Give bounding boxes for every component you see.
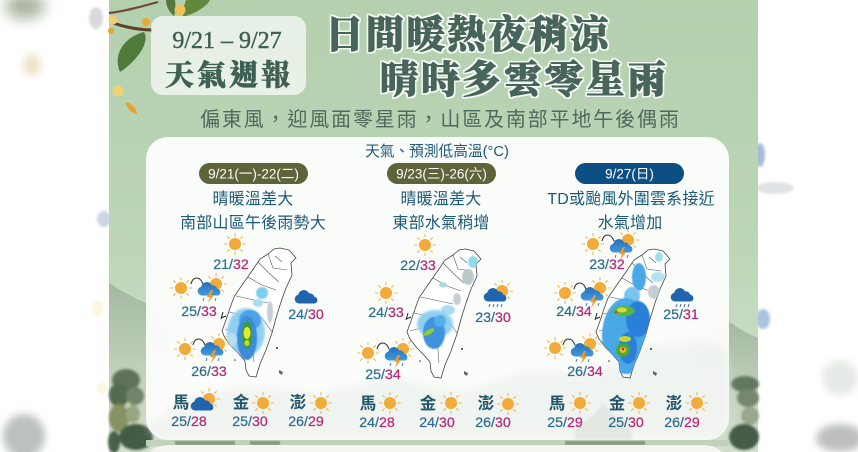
Kinmen: 金 bbox=[420, 393, 437, 413]
subtitle: 偏東風，迎風面零星雨，山區及南部平地午後偶雨 bbox=[200, 108, 681, 131]
date and title badge bbox=[151, 16, 306, 95]
north forecast bbox=[400, 234, 436, 274]
Kinmen bbox=[419, 392, 462, 431]
east forecast bbox=[288, 290, 324, 323]
main title bbox=[325, 14, 668, 102]
north forecast: 22/33 bbox=[400, 258, 436, 274]
date pill 1 bbox=[199, 163, 308, 184]
Kinmen bbox=[608, 392, 650, 431]
central forecast: 24/33 bbox=[368, 305, 404, 321]
central forecast bbox=[170, 274, 226, 320]
south forecast: 26/34 bbox=[567, 364, 603, 380]
badge title: 天氣週報 bbox=[165, 58, 293, 92]
heading 3: 水氣增加 bbox=[598, 214, 662, 232]
north forecast: 23/32 bbox=[589, 257, 625, 273]
heading 2 bbox=[392, 190, 490, 232]
Penghu bbox=[288, 392, 332, 430]
south forecast: 25/34 bbox=[365, 367, 401, 383]
date range: 9/21 – 9/27 bbox=[172, 28, 282, 54]
Penghu bbox=[664, 392, 708, 431]
Kinmen bbox=[232, 392, 274, 430]
branch, leaves and flowers bbox=[108, 0, 210, 114]
central forecast bbox=[368, 282, 404, 321]
date pill 3: 9/27(日) bbox=[605, 166, 654, 182]
south forecast bbox=[358, 338, 414, 383]
Penghu: 澎 bbox=[666, 394, 682, 413]
Kinmen: 25/30 bbox=[232, 414, 268, 430]
south forecast bbox=[174, 334, 230, 380]
Matsu bbox=[547, 392, 590, 431]
Matsu: 馬 bbox=[549, 395, 565, 413]
Penghu: 26/29 bbox=[664, 415, 700, 431]
Matsu: 馬 bbox=[360, 395, 376, 413]
east forecast: 24/30 bbox=[288, 307, 324, 323]
north forecast bbox=[213, 234, 249, 273]
east forecast bbox=[663, 288, 699, 323]
heading 1: 南部山區午後雨勢大 bbox=[180, 214, 326, 232]
date pill 2: 9/23(三)-26(六) bbox=[396, 166, 487, 182]
main title: 晴時多雲零星雨 bbox=[380, 59, 668, 102]
column 2: 9/23-26 bbox=[358, 163, 518, 431]
date pill 3 bbox=[575, 163, 684, 184]
Penghu: 澎 bbox=[478, 394, 494, 413]
Matsu bbox=[171, 388, 220, 430]
column 3: 9/27 bbox=[544, 163, 715, 431]
Kinmen: 金 bbox=[233, 392, 250, 412]
Penghu bbox=[475, 394, 518, 431]
trees bottom left bbox=[108, 369, 153, 452]
central forecast bbox=[554, 278, 610, 320]
Taiwan radar map 2 bbox=[406, 249, 481, 378]
Taiwan radar map 3 bbox=[595, 249, 670, 378]
heading 3 bbox=[547, 190, 715, 232]
Penghu: 26/30 bbox=[475, 415, 511, 431]
south forecast bbox=[544, 334, 603, 380]
heading 2: 晴暖溫差大 bbox=[400, 190, 482, 208]
column 1: 9/21-22 bbox=[170, 163, 332, 430]
south forecast: 26/33 bbox=[191, 364, 227, 380]
north forecast bbox=[582, 230, 638, 273]
central forecast: 24/34 bbox=[556, 304, 592, 320]
trees bottom right bbox=[729, 376, 759, 450]
Kinmen: 24/30 bbox=[419, 415, 455, 431]
Matsu bbox=[359, 392, 400, 431]
Matsu: 25/28 bbox=[171, 414, 207, 430]
heading 1: 晴暖溫差大 bbox=[212, 190, 294, 208]
Penghu: 澎 bbox=[290, 393, 306, 412]
east forecast bbox=[475, 280, 512, 326]
main forecast panel bbox=[146, 137, 729, 440]
date pill 2 bbox=[387, 163, 496, 184]
east forecast: 25/31 bbox=[663, 307, 699, 323]
east forecast: 23/30 bbox=[475, 310, 511, 326]
Matsu: 25/29 bbox=[547, 415, 583, 431]
heading 1 bbox=[180, 190, 326, 232]
heading 3: TD或颱風外圍雲系接近 bbox=[547, 190, 715, 208]
Matsu: 馬 bbox=[173, 394, 189, 412]
bottom strip and next panel bbox=[146, 440, 729, 452]
central forecast: 25/33 bbox=[181, 304, 217, 320]
Taiwan radar map 1 bbox=[221, 248, 296, 377]
Kinmen: 25/30 bbox=[608, 415, 644, 431]
north forecast: 21/32 bbox=[213, 257, 249, 273]
Penghu: 26/29 bbox=[288, 414, 324, 430]
heading 2: 東部水氣稍增 bbox=[392, 214, 490, 232]
Matsu: 24/28 bbox=[359, 415, 395, 431]
legend title: 天氣、預測低高溫(°C) bbox=[365, 143, 509, 160]
main title: 日間暖熱夜稍涼 bbox=[325, 14, 613, 57]
date pill 1: 9/21(一)-22(二) bbox=[208, 166, 299, 182]
poster background with mountains bbox=[109, 0, 758, 452]
Kinmen: 金 bbox=[609, 393, 626, 413]
